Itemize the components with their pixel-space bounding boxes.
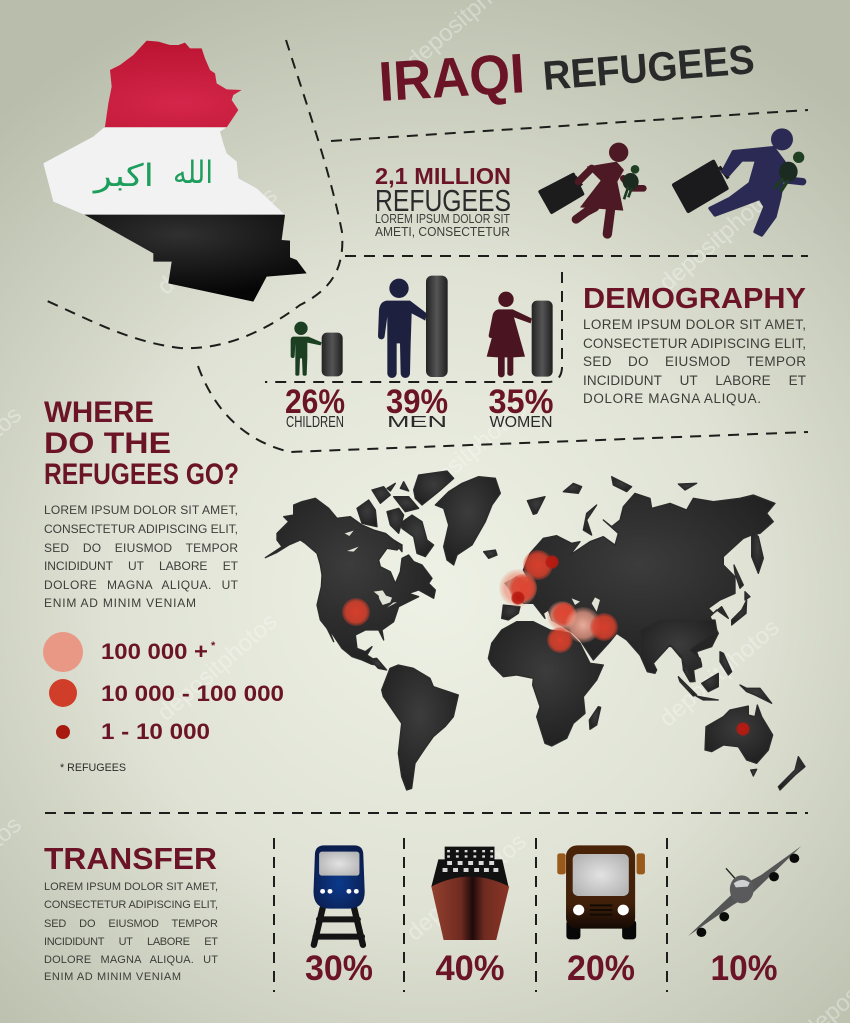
transfer text: ENIM AD MINIM VENIAM xyxy=(44,971,181,983)
icon: fleeing woman with child xyxy=(540,143,643,234)
2,1 million refugees text: AMETI, CONSECTETUR xyxy=(375,225,510,239)
demography percentages: WOMEN xyxy=(490,414,552,431)
icon: train xyxy=(313,845,365,945)
flag inscription xyxy=(92,155,213,194)
2,1 million refugees text: 2,1 MILLION xyxy=(375,163,511,189)
2,1 million refugees text: LOREM IPSUM DOLOR SIT xyxy=(375,212,510,226)
where text: INCIDIDUNT UT LABORE ET xyxy=(44,559,239,573)
transfer percentages xyxy=(305,949,778,988)
icon: ship xyxy=(431,847,509,940)
transfer text: DOLORE MAGNA ALIQUA. UT xyxy=(44,954,218,966)
demography percentages: 39% xyxy=(386,383,448,421)
demography text: INCIDIDUNT UT LABORE ET xyxy=(583,373,806,388)
map of Iraq with flag xyxy=(44,40,306,302)
legend: 100 000 + xyxy=(101,639,208,664)
legend xyxy=(43,632,284,774)
watermark: depositphotos xyxy=(152,608,283,727)
transfer percentages: 30% xyxy=(305,949,373,988)
where heading: WHERE xyxy=(44,396,154,429)
2,1 million refugees text xyxy=(375,163,511,239)
demography text: DOLORE MAGNA ALIQUA. xyxy=(583,391,761,406)
where text: CONSECTETUR ADIPISCING ELIT, xyxy=(44,522,238,536)
watermark: depositphotos xyxy=(654,614,785,733)
where text: ENIM AD MINIM VENIAM xyxy=(44,596,196,610)
demography figures and bars xyxy=(291,276,553,378)
legend: 1 - 10 000 xyxy=(101,719,210,744)
map: Eurasia xyxy=(502,477,775,670)
where heading xyxy=(44,396,239,491)
figure: child with bar xyxy=(291,322,343,376)
watermark: depositphotos xyxy=(654,178,785,297)
transfer percentages: 10% xyxy=(710,949,778,988)
title xyxy=(377,36,756,113)
demography percentages: CHILDREN xyxy=(286,414,344,431)
where text xyxy=(44,503,239,610)
legend: 10 000 - 100 000 xyxy=(101,681,284,706)
transfer percentages: 40% xyxy=(436,949,504,988)
where text: SED DO EIUSMOD TEMPOR xyxy=(44,541,238,555)
map: South-East Asia and Oceania xyxy=(640,620,805,790)
figure: man with bar xyxy=(378,276,448,378)
title: IRAQI xyxy=(377,41,526,113)
where text: DOLORE MAGNA ALIQUA. UT xyxy=(44,578,239,592)
legend: * REFUGEES xyxy=(60,762,126,774)
where text: LOREM IPSUM DOLOR SIT AMET, xyxy=(44,503,238,517)
icon: fleeing man with child xyxy=(674,128,804,235)
transfer text: CONSECTETUR ADIPISCING ELIT, xyxy=(44,899,218,911)
demography percentages: MEN xyxy=(387,414,447,431)
transfer text: SED DO EIUSMOD TEMPOR xyxy=(44,918,218,930)
demography percentages xyxy=(285,383,554,431)
where heading: DO THE xyxy=(44,427,171,460)
figure: woman with bar xyxy=(487,292,553,377)
transfer text xyxy=(44,881,218,983)
flag inscription: اكبر xyxy=(92,158,154,194)
watermark: depositphotos xyxy=(401,828,532,947)
demography text: CONSECTETUR ADIPISCING ELIT, xyxy=(583,336,806,351)
world map xyxy=(265,471,805,790)
transfer text: INCIDIDUNT UT LABORE ET xyxy=(44,936,218,948)
map: South America, Africa, Madagascar xyxy=(370,622,603,790)
legend: * xyxy=(211,640,216,652)
demography percentages: 26% xyxy=(285,383,345,421)
demography percentages: 35% xyxy=(488,383,554,421)
demography text xyxy=(583,317,806,406)
2,1 million refugees text: REFUGEES xyxy=(375,183,511,218)
demography heading: DEMOGRAPHY xyxy=(583,283,806,315)
transfer heading: TRANSFER xyxy=(44,841,217,876)
where heading: REFUGEES GO? xyxy=(44,458,239,491)
flag inscription: الله xyxy=(173,155,213,190)
watermark: depositphotos xyxy=(401,396,532,515)
icon: bus xyxy=(557,845,645,939)
transfer text: LOREM IPSUM DOLOR SIT AMET, xyxy=(44,881,218,893)
demography text: LOREM IPSUM DOLOR SIT AMET, xyxy=(583,317,806,332)
demography text: SED DO EIUSMOD TEMPOR xyxy=(583,354,806,369)
title: REFUGEES xyxy=(541,36,756,99)
transfer percentages: 20% xyxy=(567,949,635,988)
watermark: depositphotos xyxy=(152,182,283,301)
refugee destination markers xyxy=(342,550,750,736)
icon: airplane xyxy=(688,846,801,937)
map: North America and Greenland xyxy=(265,471,500,665)
